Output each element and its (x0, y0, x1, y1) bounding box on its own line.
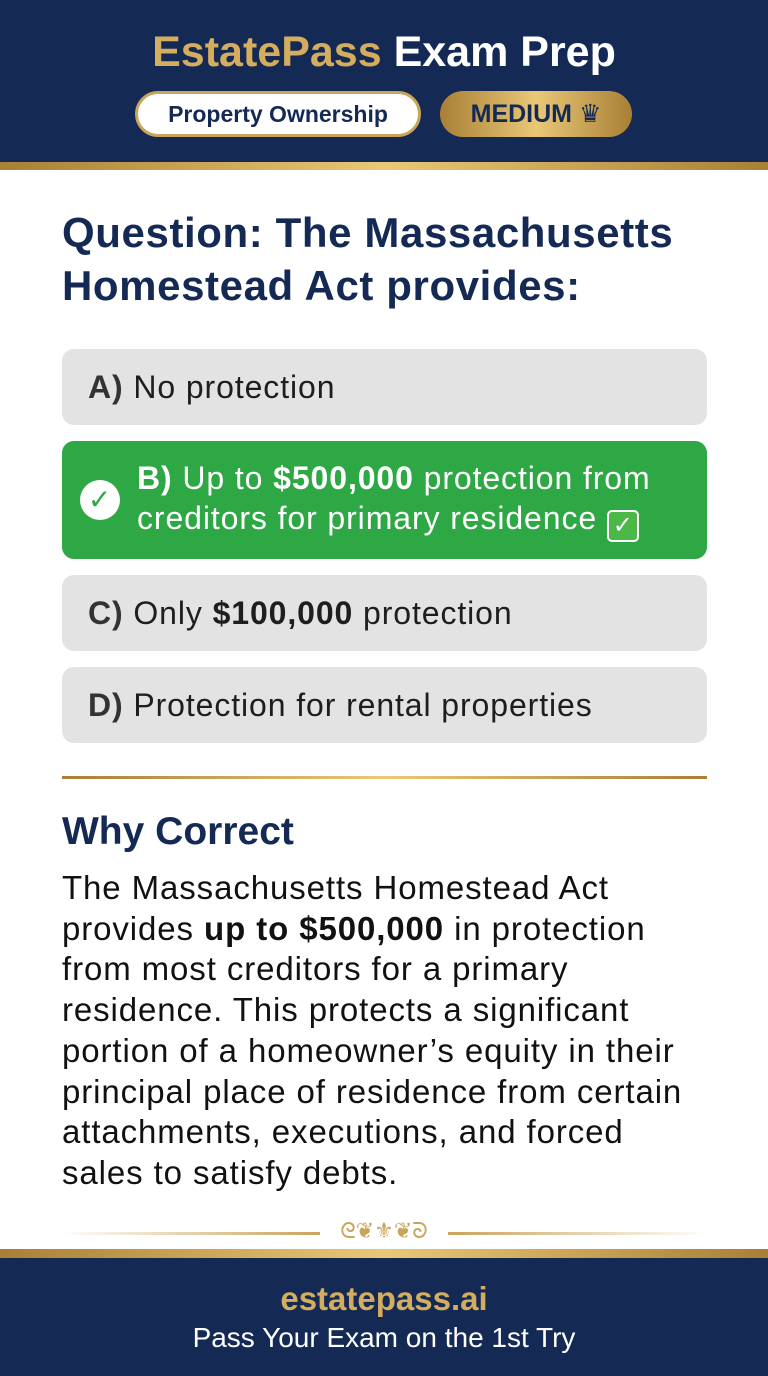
explanation: sales to satisfy debts. (62, 1154, 398, 1191)
footer url: estatepass.ai (280, 1280, 488, 1317)
explanation: residence. This protects a significant (62, 991, 629, 1028)
footer (0, 1258, 768, 1376)
option B correct (62, 441, 707, 559)
explanation: principal place of residence from certain (62, 1073, 682, 1110)
why correct heading: Why Correct (62, 810, 294, 853)
option B correct: ✓ (613, 512, 633, 539)
question heading: Homestead Act provides: (62, 262, 581, 309)
option A: No protection (133, 368, 335, 404)
icon: check (80, 480, 120, 520)
ornament divider: ᘓ❦⚜❦ᘐ (340, 1218, 428, 1243)
explanation (62, 869, 682, 1191)
explanation: The Massachusetts Homestead Act (62, 869, 609, 906)
option C (62, 575, 707, 651)
badge: difficulty: MEDIUM ♛ (471, 100, 601, 128)
option D: Protection for rental properties (133, 686, 593, 722)
question heading (62, 209, 673, 309)
explanation: portion of a homeowner’s equity in their (62, 1032, 675, 1069)
explanation: attachments, executions, and forced (62, 1113, 624, 1150)
option B correct: B) Up to $500,000 protection from (137, 460, 651, 496)
option C: $100,000 (213, 594, 353, 630)
ornament divider (73, 1218, 696, 1243)
explanation: provides up to $500,000 in protection (62, 910, 646, 947)
option C: C) (88, 594, 124, 630)
title: EstatePass Exam Prep (152, 28, 616, 76)
icon: check: ✓ (88, 484, 112, 515)
badge: topic (135, 91, 421, 137)
option A: A) (88, 368, 124, 404)
badge: difficulty (440, 91, 632, 137)
option B correct: creditors for primary residence (137, 500, 597, 536)
option D (62, 667, 707, 743)
explanation: from most creditors for a primary (62, 950, 568, 987)
option C: Only protection (133, 594, 513, 630)
badge: topic: Property Ownership (168, 101, 388, 127)
option A (62, 349, 707, 425)
question heading: Question: The Massachusetts (62, 209, 673, 256)
tagline: Pass Your Exam on the 1st Try (193, 1322, 575, 1353)
option D: D) (88, 686, 124, 722)
header (0, 0, 768, 162)
